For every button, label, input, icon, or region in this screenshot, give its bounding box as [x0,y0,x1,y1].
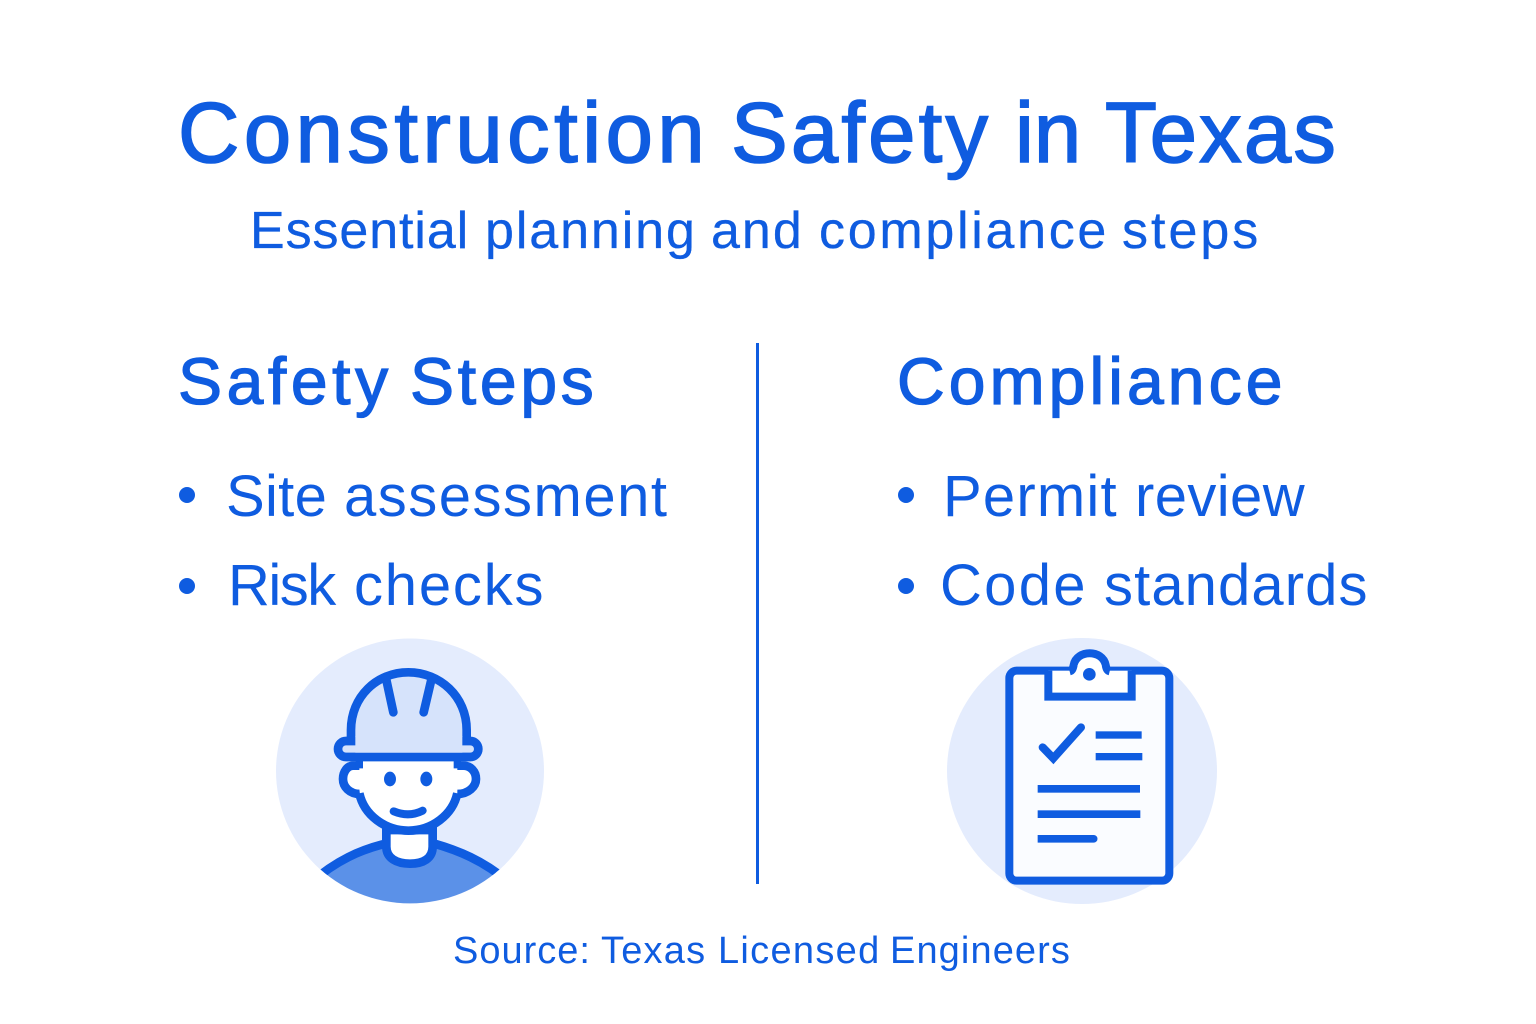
list: safety steps: Risk [228,553,337,618]
neck [386,830,433,864]
subtitle: compliance [819,202,1109,260]
subtitle: and [711,202,804,260]
source: Source: [453,930,591,972]
subtitle: Essential [250,202,469,260]
source: Engineers [890,930,1071,972]
icon: construction worker [276,638,544,910]
title: in [1015,86,1081,181]
title: Construction [178,86,709,181]
ears [343,766,360,794]
panel: compliance [897,344,1369,904]
face [359,758,457,831]
list: compliance: review [1135,464,1306,529]
lines [1096,731,1142,739]
checkmark [1043,727,1081,758]
title: Safety [731,86,991,181]
list: safety steps: Site [226,464,327,529]
shirt [320,840,500,904]
panel: safety steps [178,344,668,910]
board [1009,671,1169,881]
subtitle: steps [1122,202,1261,260]
list: safety steps: checks [354,553,545,618]
title: Texas [1105,86,1338,181]
list: compliance [898,464,1369,618]
list: safety steps [179,464,668,618]
list: compliance: standards [1104,553,1369,618]
heading: safety steps: Safety [178,344,393,418]
helmet [351,672,467,742]
divider [756,343,759,884]
list: safety steps: assessment [344,464,668,529]
heading: compliance: Compliance [897,344,1286,418]
clip [1048,653,1132,697]
subtitle: planning [485,202,697,260]
list: compliance: Permit [943,464,1118,529]
source: Licensed [718,930,881,972]
icon: clipboard [947,638,1217,904]
list: compliance: Code [940,553,1088,618]
source: Texas [601,930,706,972]
heading: safety steps: Steps [410,344,598,418]
